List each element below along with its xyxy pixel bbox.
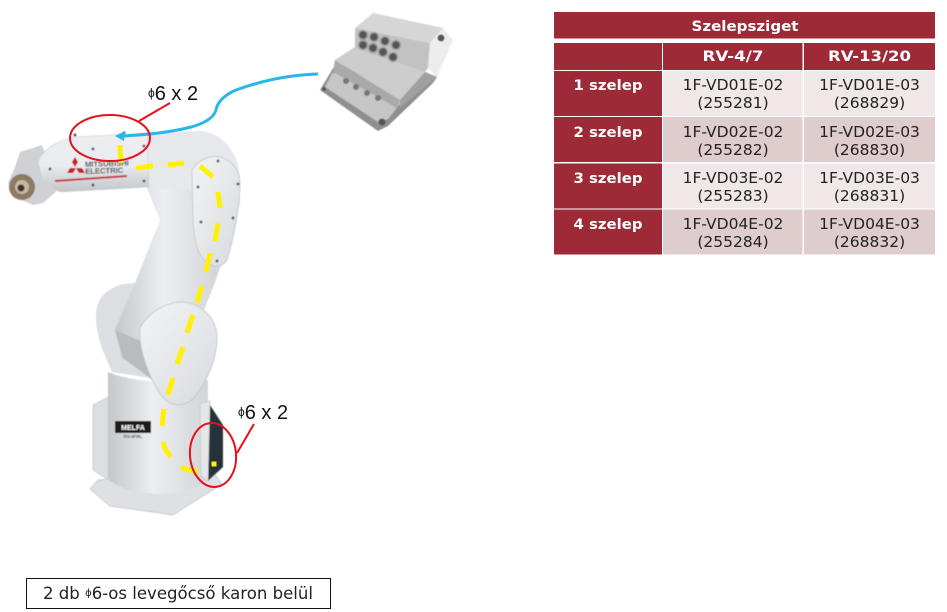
row: 1 szelep: (268829) xyxy=(834,94,905,112)
arm bolts xyxy=(48,132,240,262)
row: 3 szelep: 1F-VD03E-03 xyxy=(819,169,920,187)
elbow housing xyxy=(145,131,240,250)
MELFA badge xyxy=(115,421,151,439)
shoulder front cover xyxy=(140,302,217,405)
base cylinder xyxy=(108,372,208,494)
port face xyxy=(355,28,430,72)
header row: RV-13/20 xyxy=(828,49,911,65)
caption box: 2 db xyxy=(43,584,80,603)
row: 4 szelep: (268832) xyxy=(834,233,905,251)
blue air tube arrow xyxy=(115,74,318,141)
mounting holes xyxy=(322,34,444,126)
row: 1 szelep: 1 szelep xyxy=(574,78,642,94)
row: 3 szelep xyxy=(554,164,935,208)
row: 1 szelep: (255281) xyxy=(697,94,769,112)
bottom tube label: 6 x 2 xyxy=(245,402,288,424)
row: 4 szelep: 1F-VD04E-03 xyxy=(819,215,920,233)
row: 2 szelep: 1F-VD02E-03 xyxy=(819,123,920,141)
Mitsubishi logo mark xyxy=(67,157,85,173)
yellow dashed tube route xyxy=(120,145,220,471)
row: 2 szelep: 2 szelep xyxy=(574,125,642,141)
base plate xyxy=(90,470,222,515)
bottom red callout xyxy=(187,421,254,489)
row: 4 szelep: (255284) xyxy=(697,233,769,251)
shoulder rear lobe xyxy=(96,283,156,378)
header row: RV-4/7 xyxy=(702,49,764,65)
row: 2 szelep: (255282) xyxy=(697,141,769,159)
table title xyxy=(554,12,935,38)
middle block top xyxy=(335,47,425,100)
robot arm illustration xyxy=(8,131,240,515)
caption box: 6-os levegőcső karon belül xyxy=(92,584,313,603)
wrist body xyxy=(8,145,58,205)
row: 4 szelep: 4 szelep xyxy=(574,217,642,233)
end face xyxy=(428,28,453,77)
rear base block xyxy=(93,396,112,482)
row: 1 szelep: 1F-VD01E-03 xyxy=(819,76,920,94)
bottom tube label: ϕ xyxy=(238,405,245,419)
connector side plate xyxy=(200,401,210,481)
row: 1 szelep xyxy=(554,71,935,116)
valve manifold photo xyxy=(320,13,453,131)
top red callout xyxy=(70,103,170,161)
row: 4 szelep: 1F-VD04E-02 xyxy=(683,215,783,233)
table title: Szelepsziget xyxy=(692,19,799,35)
solenoid screws xyxy=(343,78,381,101)
elbow cover xyxy=(192,157,240,266)
dark connector box xyxy=(208,402,223,481)
shoulder shadow xyxy=(115,330,165,395)
bottom plate top xyxy=(325,73,425,122)
right block side xyxy=(400,72,437,108)
red arm stripe xyxy=(55,176,127,181)
MELFA badge: RV-4FRL xyxy=(124,434,143,439)
header row xyxy=(554,43,935,70)
table: Szelepsziget xyxy=(554,12,935,254)
top tube label: ϕ xyxy=(148,86,155,100)
tool flange xyxy=(9,174,35,200)
row: 3 szelep: (255283) xyxy=(697,187,769,205)
air fittings xyxy=(358,30,400,62)
top tube label: 6 x 2 xyxy=(155,83,198,105)
middle block front xyxy=(333,60,400,108)
row: 2 szelep xyxy=(554,117,935,162)
caption box: ϕ xyxy=(85,588,92,599)
MELFA badge: MELFA xyxy=(121,425,145,432)
bottom plate side xyxy=(320,65,437,131)
Mitsubishi Electric wordmark: ELECTRIC xyxy=(85,166,124,176)
row: 1 szelep: 1F-VD01E-02 xyxy=(683,76,783,94)
forearm xyxy=(38,133,149,192)
Mitsubishi Electric wordmark: MITSUBISHI xyxy=(85,158,129,169)
upper arm xyxy=(115,186,222,376)
top surface xyxy=(355,13,443,43)
row: 2 szelep: (268830) xyxy=(834,141,905,159)
row: 3 szelep: 3 szelep xyxy=(574,171,642,187)
row: 2 szelep: 1F-VD02E-02 xyxy=(683,123,783,141)
row: 3 szelep: (268831) xyxy=(834,187,905,205)
row: 4 szelep xyxy=(554,210,935,254)
row: 3 szelep: 1F-VD03E-02 xyxy=(683,169,783,187)
caption box xyxy=(26,578,330,608)
